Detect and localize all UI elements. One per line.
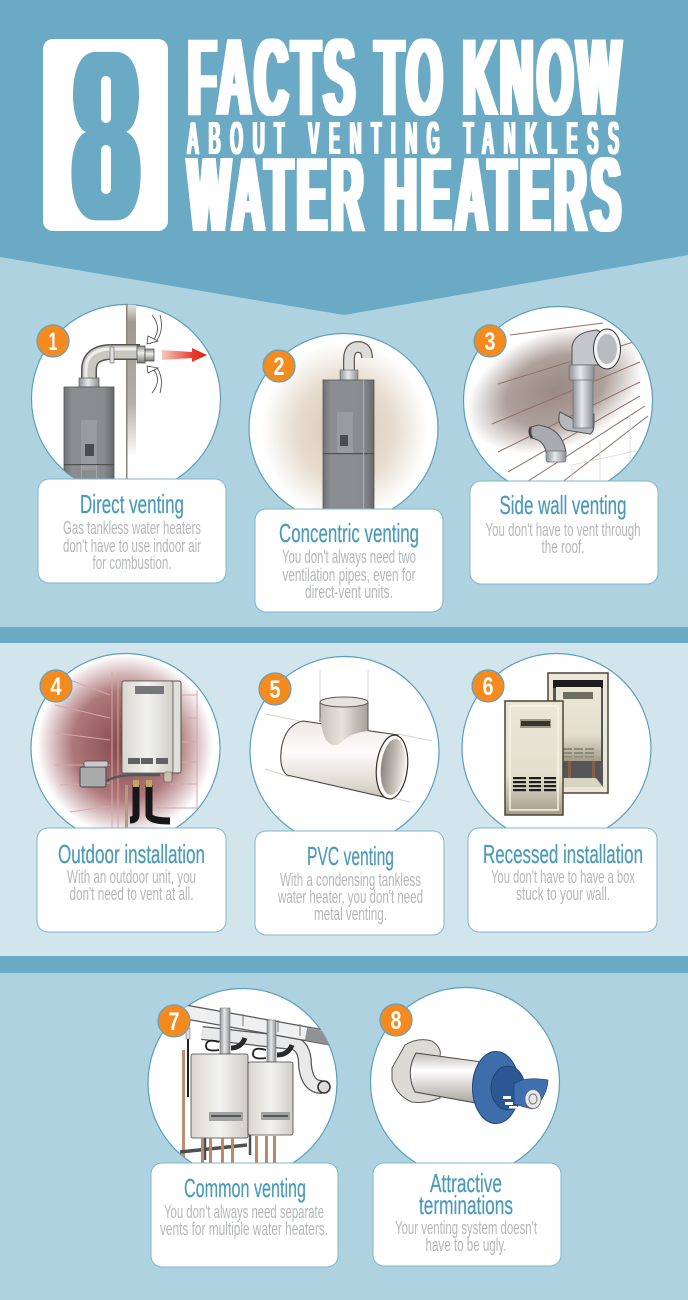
title <box>187 16 621 254</box>
card: With an outdoor unit, you <box>67 867 196 887</box>
badge 3: 3 <box>484 328 496 356</box>
panel: 2 concentric venting <box>249 334 443 612</box>
panel: 6 recessed installation <box>462 654 657 932</box>
card: Common venting <box>184 1173 306 1203</box>
panel: 5 PVC venting <box>250 656 444 935</box>
card <box>151 1163 338 1267</box>
card: terminations <box>419 1190 513 1220</box>
big number 8 <box>43 3 168 269</box>
card: metal venting. <box>314 904 387 924</box>
card <box>468 828 657 932</box>
card <box>37 828 226 932</box>
big number 8: 8 <box>78 3 134 269</box>
header banner <box>0 0 688 315</box>
panel: 4 outdoor installation <box>31 654 226 932</box>
card <box>38 479 226 583</box>
card: You don't always need separate <box>164 1202 324 1222</box>
card: vents for multiple water heaters. <box>160 1219 328 1239</box>
illustration: outdoor unit <box>37 655 213 835</box>
badge 5 <box>259 673 291 705</box>
badge 1: 1 <box>48 328 58 356</box>
card: don't need to vent at all. <box>70 884 194 904</box>
badge 2 <box>263 350 295 382</box>
card: stuck to your wall. <box>516 884 610 904</box>
title: ABOUT VENTING TANKLESS <box>187 114 619 165</box>
illustration: side wall pipes <box>470 322 648 480</box>
badge 3 <box>474 325 506 357</box>
card: water heater, you don't need <box>277 887 423 907</box>
card <box>255 509 443 612</box>
badge 4 <box>40 670 72 702</box>
card <box>373 1163 561 1266</box>
arrow: exhaust <box>162 348 207 362</box>
badge 2: 2 <box>274 353 284 381</box>
panel: 8 attractive terminations <box>370 988 561 1266</box>
card: Your venting system doesn't <box>395 1218 537 1238</box>
illustration: concentric vent heater <box>268 341 422 508</box>
card: have to be ugly. <box>426 1235 506 1255</box>
illustration: direct vent heater <box>64 304 161 487</box>
card: ventilation pipes, even for <box>282 565 416 585</box>
illustration: common vented heaters <box>180 1008 332 1175</box>
card: the roof. <box>542 537 584 557</box>
card <box>470 481 658 584</box>
badge 1 <box>37 325 69 357</box>
card: for combustion. <box>92 553 172 573</box>
badge 7: 7 <box>168 1008 180 1036</box>
illustration: PVC tee <box>265 670 432 802</box>
illustration: blue termination <box>392 1040 548 1124</box>
card: You don't always need two <box>282 547 416 567</box>
panel: 7 common venting <box>148 988 338 1267</box>
badge 7 <box>158 1005 190 1037</box>
card: Outdoor installation <box>58 839 205 869</box>
badge 6 <box>472 670 504 702</box>
card: Attractive <box>430 1168 502 1198</box>
card: Direct venting <box>80 489 184 519</box>
card <box>255 831 444 935</box>
title: FACTS TO KNOW <box>188 16 621 138</box>
badge 8 <box>380 1004 412 1036</box>
card: don't have to use indoor air <box>63 536 201 556</box>
card: Concentric venting <box>279 518 419 548</box>
card: Gas tankless water heaters <box>63 518 201 538</box>
card: direct-vent units. <box>305 582 393 602</box>
panel: 3 side wall venting <box>448 302 662 584</box>
badge 6: 6 <box>482 673 494 701</box>
illustration: recessed units <box>505 673 608 815</box>
badge 8: 8 <box>390 1007 402 1035</box>
card: With a condensing tankless <box>280 870 421 890</box>
badge 5: 5 <box>270 676 281 704</box>
badge 4: 4 <box>50 673 62 701</box>
title: WATER HEATERS <box>188 136 621 254</box>
card: PVC venting <box>307 841 394 871</box>
panel: 1 direct venting <box>32 304 226 583</box>
